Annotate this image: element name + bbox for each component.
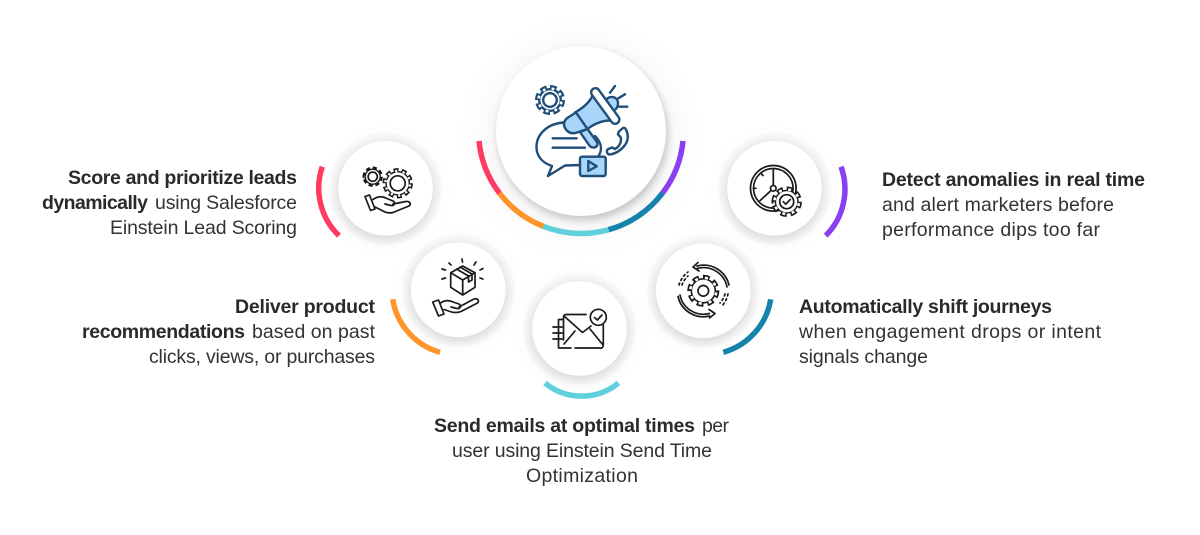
node circle — [330, 132, 442, 244]
text block: anomaly detection: and alert marketers before — [882, 194, 1114, 216]
text block: anomaly detection: performance dips too far — [882, 219, 1100, 241]
text block: journey shift — [798, 296, 1102, 368]
text block: product recommendations: clicks, views, or purchases — [149, 346, 375, 368]
text block: lead scoring — [42, 167, 297, 239]
text block: lead scoring: Score and prioritize leads — [68, 167, 297, 189]
segmented arc under hub — [479, 141, 683, 233]
node circle — [647, 235, 759, 347]
cyan arc — [545, 383, 618, 396]
text block: journey shift: when engagement drops or intent — [798, 321, 1102, 343]
text block: anomaly detection — [882, 169, 1145, 241]
orange arc — [393, 299, 440, 352]
panel: anomaly detection — [718, 132, 845, 244]
panel: central hub — [479, 46, 683, 233]
text block: lead scoring: using Salesforce — [155, 192, 297, 214]
text block: lead scoring: Einstein Lead Scoring — [110, 217, 297, 239]
icon: phone — [607, 128, 628, 154]
text block: send time: Send emails at optimal times — [434, 415, 695, 437]
text block: send time: Optimization — [526, 465, 638, 487]
icon: clock with gear — [750, 166, 800, 215]
pink arc — [319, 167, 339, 236]
icon: megaphone — [606, 97, 618, 111]
node circle — [718, 132, 830, 244]
blue arc — [723, 299, 771, 352]
text block: journey shift: signals change — [799, 346, 928, 368]
icon: gears over hand — [364, 168, 411, 213]
text block: anomaly detection: Detect anomalies in real time — [882, 169, 1145, 191]
icon: video player — [580, 157, 606, 176]
text block: lead scoring: dynamically — [42, 192, 148, 214]
text block: send time — [434, 415, 730, 487]
purple arc — [826, 167, 845, 236]
panel: journey shift — [647, 235, 771, 352]
icon: gear with cycle arrows — [678, 262, 729, 318]
text block: product recommendations: recommendations — [82, 321, 245, 343]
text block: product recommendations — [82, 296, 376, 368]
hub circle — [496, 46, 666, 216]
node circle — [402, 234, 514, 346]
text block: send time: per — [702, 415, 730, 437]
text block: product recommendations: Deliver product — [235, 296, 376, 318]
panel: product recommendations — [393, 234, 514, 352]
text block: send time: user using Einstein Send Time — [452, 440, 712, 462]
panel: send time — [524, 272, 636, 396]
node circle — [524, 272, 636, 384]
icon: megaphone with gear, chat bubble, phone and video — [536, 86, 628, 176]
icon: box over hand — [433, 259, 483, 316]
icon: gear — [538, 88, 562, 112]
icon: email with check — [553, 309, 606, 348]
text block: product recommendations: based on past — [252, 321, 376, 343]
text block: journey shift: Automatically shift journeys — [799, 296, 1052, 318]
icon: speech bubble — [536, 122, 580, 176]
panel: lead scoring — [319, 132, 442, 244]
